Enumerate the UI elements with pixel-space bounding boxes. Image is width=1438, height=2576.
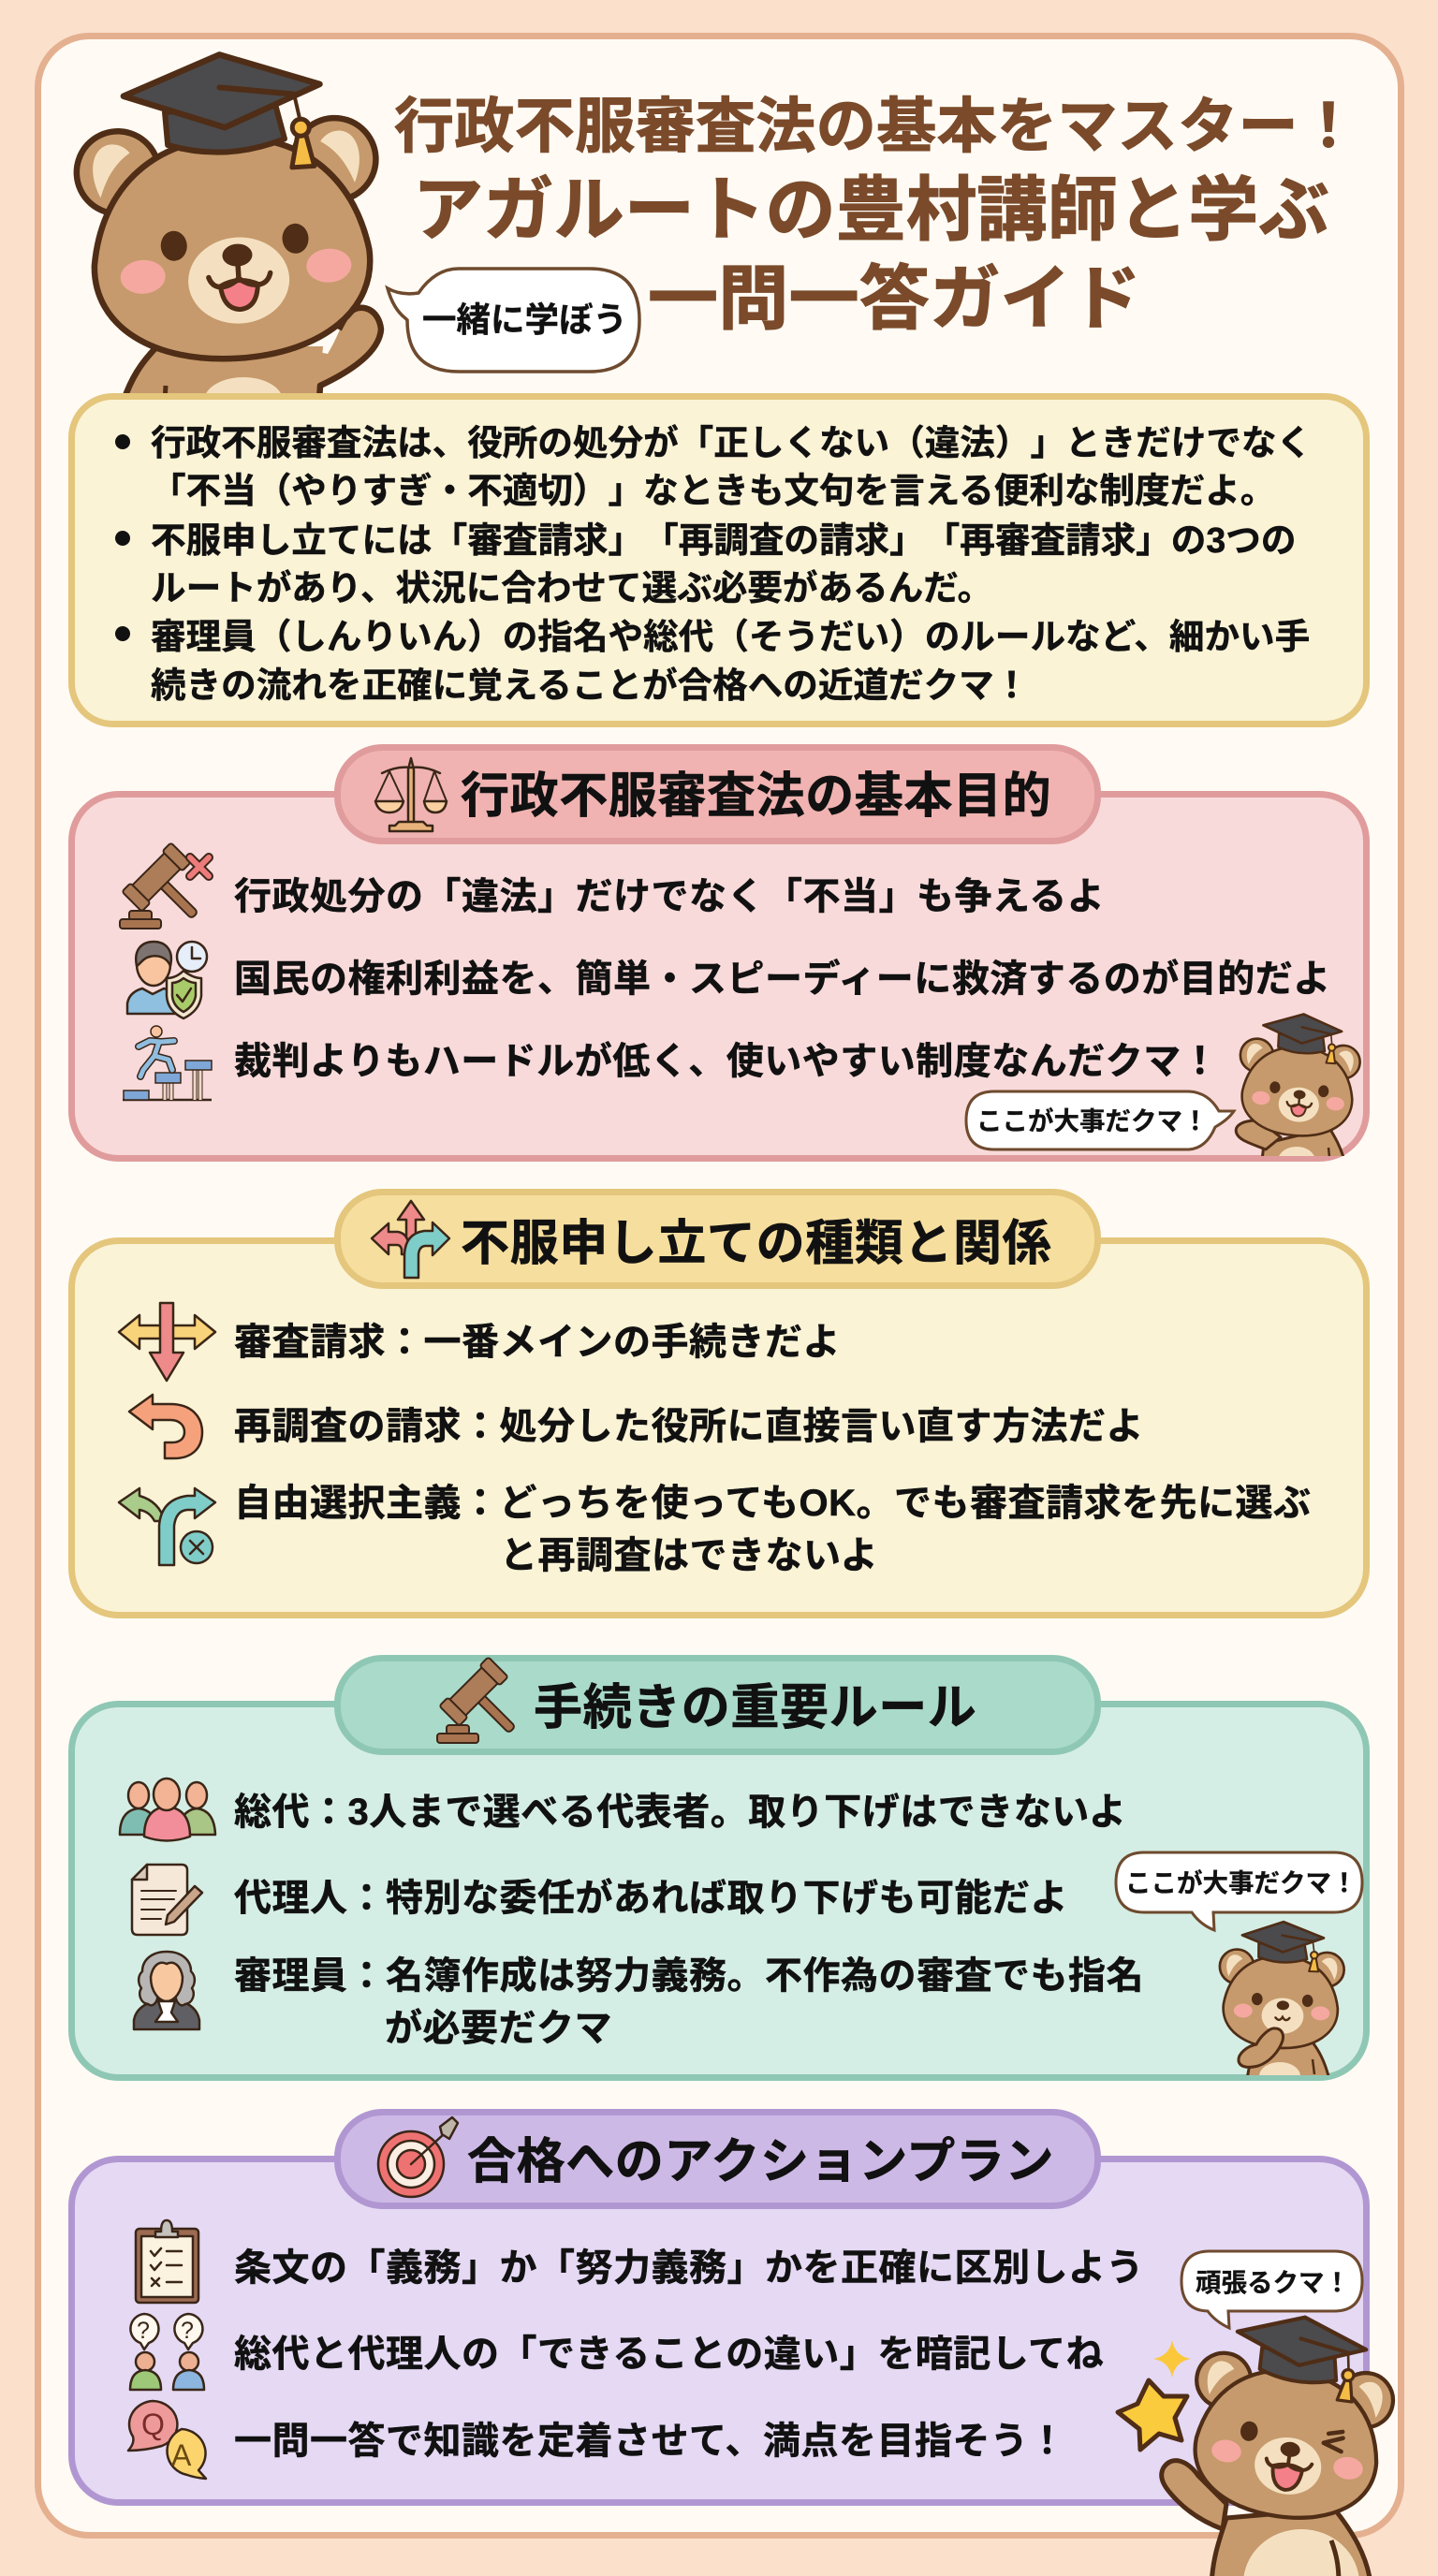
heading text: 行政不服審査法の基本目的 bbox=[461, 769, 1051, 824]
icon: scales bbox=[375, 758, 447, 831]
row 2 text: 再調査の請求：処分した役所に直接言い直す方法だよ bbox=[234, 1406, 1144, 1447]
bullet 3: 審理員（しんりいん）の指名や総代（そうだい）のルールなど、細かい手 bbox=[151, 617, 1310, 656]
speech bubble: ここが大事だクマ！ bbox=[1116, 1852, 1362, 1930]
speech bubble: 一緒に学ぼう bbox=[388, 269, 639, 372]
row 1 text: 条文の「義務」か「努力義務」かを正確に区別しよう bbox=[234, 2247, 1144, 2289]
row 3 continuation text: と再調査はできないよ bbox=[500, 1535, 878, 1576]
title: アガルートの豊村講師と学ぶ bbox=[413, 170, 1329, 249]
row 1 icon: crossing arrows bbox=[119, 1303, 215, 1381]
row 2 icon: U-turn arrow bbox=[129, 1395, 202, 1458]
speech bubble: 頑張るクマ！: 頑張るクマ！ bbox=[1196, 2268, 1350, 2297]
icon: sparkle bbox=[1153, 2340, 1191, 2378]
speech bubble: 一緒に学ぼう: 一緒に学ぼう bbox=[422, 300, 627, 339]
title: 行政不服審査法の基本をマスター！ bbox=[394, 93, 1358, 160]
row 2 text: 総代と代理人の「できることの違い」を暗記してね bbox=[234, 2334, 1104, 2375]
panel: 重要ルール bbox=[71, 1657, 1367, 2078]
heading pill bbox=[337, 747, 1097, 841]
speech bubble: ここが大事だクマ！ bbox=[966, 1091, 1234, 1149]
row 2 icon: two people with questions: ? bbox=[137, 2318, 150, 2344]
mascot: small bear in pink panel bbox=[1234, 1013, 1361, 1156]
title: 一問一答ガイド bbox=[648, 259, 1141, 338]
bullet 2: ルートがあり、状況に合わせて選ぶ必要があるんだ。 bbox=[151, 568, 992, 607]
row 1 icon: three people bbox=[120, 1778, 215, 1840]
speech bubble: ここが大事だクマ！: ここが大事だクマ！ bbox=[976, 1106, 1208, 1135]
row 3 icon: fork arrows with no-entry bbox=[119, 1488, 215, 1565]
bear head bbox=[1180, 2304, 1403, 2530]
heading pill bbox=[337, 1193, 1097, 1286]
bullet 3 bbox=[115, 617, 1310, 705]
row 3 icon: judge with wig bbox=[134, 1952, 199, 2029]
speech bubble: 頑張るクマ！ bbox=[1181, 2251, 1362, 2328]
bullet 2 bbox=[115, 520, 1296, 607]
bear body bbox=[1162, 2461, 1371, 2576]
bullet 3: 続きの流れを正確に覚えることが合格への近道だクマ！ bbox=[151, 666, 1029, 705]
row 3 continuation text: が必要だクマ bbox=[385, 2008, 612, 2049]
mascot: waving bear with graduation cap bbox=[70, 46, 388, 424]
row 1 text: 総代：3人まで選べる代表者。取り下げはできないよ bbox=[234, 1792, 1126, 1833]
row 3 text: 自由選択主義：どっちを使ってもOK。でも審査請求を先に選ぶ bbox=[234, 1483, 1311, 1524]
heading text: 不服申し立ての種類と関係 bbox=[461, 1217, 1051, 1271]
bullet 1: 「不当（やりすぎ・不適切）」なときも文句を言える便利な制度だよ。 bbox=[151, 471, 1275, 510]
panel: 基本目的 bbox=[71, 747, 1367, 1159]
row 3 text: 一問一答で知識を定着させて、満点を目指そう！ bbox=[234, 2421, 1066, 2462]
row 3 icon: runner and hurdles bbox=[123, 1026, 212, 1100]
row 1 text: 行政処分の「違法」だけでなく「不当」も争えるよ bbox=[234, 876, 1105, 917]
heading pill bbox=[337, 1659, 1097, 1752]
icon: three-way arrows bbox=[372, 1201, 449, 1278]
heading text: 合格へのアクションプラン bbox=[467, 2135, 1054, 2189]
panel: 種類と関係 bbox=[71, 1193, 1367, 1616]
row 3 icon: Q and A bubbles: Q bbox=[141, 2408, 165, 2441]
bullet 1: 行政不服審査法は、役所の処分が「正しくない（違法）」ときだけでなく bbox=[151, 423, 1312, 462]
row 2 text: 代理人：特別な委任があれば取り下げも可能だよ bbox=[234, 1878, 1068, 1919]
row 2 icon: document and pen bbox=[132, 1865, 202, 1935]
panel: summary bbox=[71, 397, 1367, 724]
speech bubble: ここが大事だクマ！: ここが大事だクマ！ bbox=[1125, 1868, 1357, 1897]
row 2 icon: two people with questions: ? bbox=[181, 2318, 194, 2344]
row 1 icon: checklist clipboard bbox=[136, 2220, 198, 2303]
icon: target with arrow bbox=[378, 2117, 458, 2197]
row 3 icon: Q and A bubbles bbox=[128, 2401, 206, 2479]
icon: gavel bbox=[437, 1657, 516, 1743]
row 1 icon: gavel with cross bbox=[120, 842, 209, 929]
row 2 text: 国民の権利利益を、簡単・スピーディーに救済するのが目的だよ bbox=[234, 958, 1331, 1000]
title bbox=[394, 93, 1358, 338]
mascot: winking bear with star bbox=[1118, 2251, 1403, 2576]
row 3 text: 審理員：名簿作成は努力義務。不作為の審査でも指名 bbox=[234, 1955, 1144, 1997]
icon: star bbox=[1118, 2380, 1187, 2450]
heading text: 手続きの重要ルール bbox=[534, 1681, 976, 1735]
row 3 text: 裁判よりもハードルが低く、使いやすい制度なんだクマ！ bbox=[234, 1041, 1219, 1082]
bullet 1 bbox=[115, 423, 1312, 510]
row 2 icon: person, clock and shield bbox=[127, 942, 207, 1018]
heading pill bbox=[337, 2112, 1097, 2205]
mascot: thinking bear in green panel bbox=[1219, 1921, 1345, 2075]
row 1 text: 審査請求：一番メインの手続きだよ bbox=[234, 1322, 841, 1363]
bullet 2: 不服申し立てには「審査請求」「再調査の請求」「再審査請求」の3つの bbox=[151, 520, 1296, 560]
row 3 icon: Q and A bubbles: A bbox=[171, 2438, 192, 2472]
panel: アクションプラン bbox=[71, 2112, 1367, 2503]
row 2 icon: two people with questions bbox=[130, 2314, 204, 2390]
